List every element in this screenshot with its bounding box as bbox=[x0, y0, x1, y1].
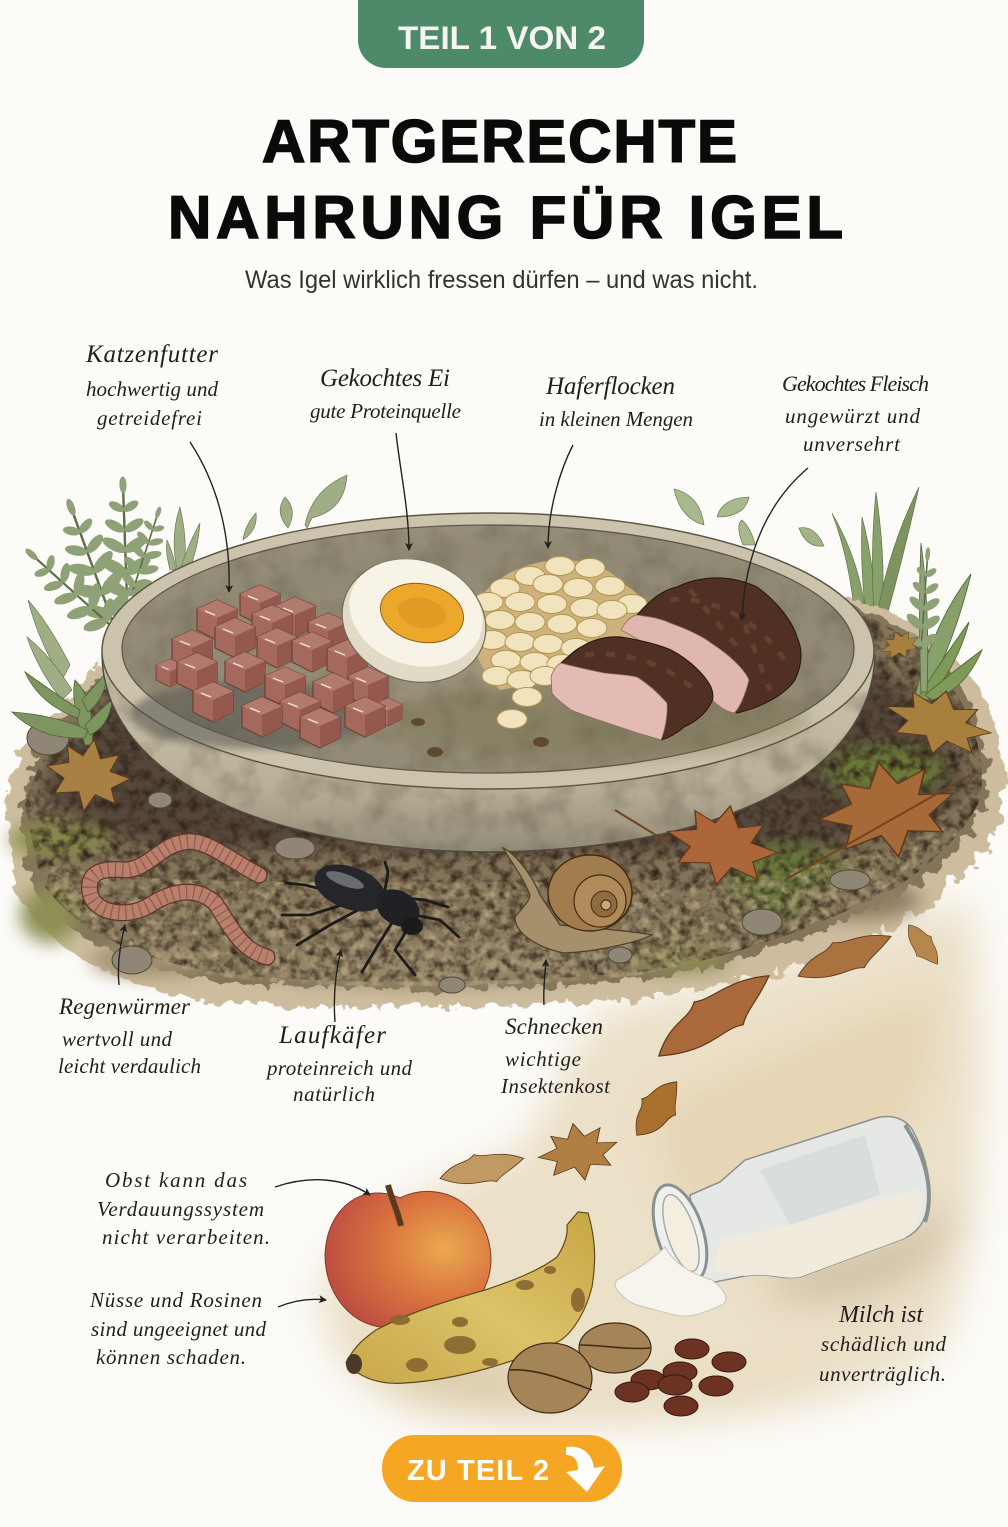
label: Schnecken: wichtige bbox=[505, 1047, 581, 1071]
label: Gekochtes Fleisch bbox=[782, 371, 929, 456]
label: Haferflocken: Haferflocken bbox=[545, 373, 675, 400]
label: Obst bbox=[97, 1168, 270, 1249]
label: Laufkäfer: proteinreich und bbox=[265, 1056, 412, 1080]
title: ARTGERECHTE bbox=[262, 108, 737, 175]
label: Gekochtes Ei bbox=[310, 365, 461, 423]
label: Milch bbox=[819, 1302, 946, 1386]
worm bbox=[89, 842, 267, 957]
beetle bbox=[282, 856, 459, 975]
label: Schnecken bbox=[500, 1014, 611, 1098]
label: Nüsse und Rosinen: können schaden. bbox=[96, 1345, 246, 1369]
banana bbox=[346, 1212, 595, 1383]
label: Milch: schädlich und bbox=[821, 1332, 946, 1356]
label: Katzenfutter: getreidefrei bbox=[97, 406, 202, 430]
label: Gekochtes Ei: gute Proteinquelle bbox=[310, 399, 461, 423]
label: Obst: nicht verarbeiten. bbox=[102, 1225, 270, 1249]
title: NAHRUNG FÜR IGEL bbox=[168, 184, 843, 251]
milk jar bbox=[643, 1116, 929, 1288]
food: cat food cubes bbox=[156, 585, 402, 748]
plants right bbox=[674, 487, 919, 620]
low plants over soil bbox=[12, 543, 982, 745]
label: Laufkäfer: natürlich bbox=[293, 1082, 375, 1106]
label: Obst: Verdauungssystem bbox=[97, 1197, 264, 1221]
label: Laufkäfer: Laufkäfer bbox=[278, 1022, 386, 1049]
dried leaves bbox=[40, 625, 998, 1187]
label: Katzenfutter bbox=[85, 341, 218, 430]
label: Milch: unverträglich. bbox=[819, 1362, 946, 1386]
label: Regenwürmer: wertvoll und bbox=[62, 1027, 172, 1051]
label: Gekochtes Fleisch: Gekochtes Fleisch bbox=[782, 371, 929, 396]
spilled milk powder bbox=[615, 1247, 726, 1316]
walnuts bbox=[508, 1323, 651, 1413]
food: oat flakes bbox=[471, 556, 648, 728]
subtitle: Was Igel wirklich fressen dürfen – und was nicht. bbox=[245, 266, 758, 294]
callout arrows bbox=[118, 433, 808, 1307]
button: to part 2: ZU TEIL 2 bbox=[407, 1455, 549, 1487]
label: Nüsse und Rosinen: sind ungeeignet und bbox=[91, 1317, 266, 1341]
label: Nüsse und Rosinen: Nüsse und Rosinen bbox=[89, 1288, 262, 1312]
label: Laufkäfer bbox=[265, 1022, 412, 1106]
label: Regenwürmer: leicht verdaulich bbox=[58, 1054, 201, 1078]
badge: part 1 of 2: TEIL 1 VON 2 bbox=[398, 20, 606, 56]
label: Regenwürmer: Regenwürmer bbox=[58, 994, 191, 1019]
apple bbox=[325, 1185, 491, 1328]
ground soil bbox=[5, 600, 1003, 1007]
raisins bbox=[615, 1339, 746, 1416]
label: Haferflocken: in kleinen Mengen bbox=[539, 407, 693, 431]
label: Milch: Milch ist bbox=[838, 1302, 924, 1328]
label: Haferflocken bbox=[539, 373, 693, 431]
label: Schnecken: Schnecken bbox=[505, 1014, 603, 1039]
sandy path bbox=[320, 900, 981, 1425]
food: cooked meat bbox=[551, 578, 801, 740]
snail bbox=[503, 848, 652, 953]
label: Gekochtes Fleisch: ungewürzt und bbox=[785, 404, 920, 428]
label: Schnecken: Insektenkost bbox=[500, 1074, 611, 1098]
label: Regenwürmer bbox=[58, 994, 201, 1078]
plate bbox=[102, 513, 875, 852]
title bbox=[168, 108, 843, 251]
button: to part 2 bbox=[382, 1435, 622, 1502]
label: Gekochtes Ei: Gekochtes Ei bbox=[320, 365, 450, 392]
label: Katzenfutter: hochwertig und bbox=[86, 377, 218, 401]
label: Nüsse und Rosinen bbox=[89, 1288, 266, 1369]
food: boiled egg bbox=[326, 541, 502, 701]
label: Katzenfutter: Katzenfutter bbox=[85, 341, 218, 368]
badge: part 1 of 2 bbox=[358, 0, 644, 68]
label: Obst: Obst kann das bbox=[105, 1168, 247, 1192]
label: Gekochtes Fleisch: unversehrt bbox=[803, 432, 901, 456]
plants left bbox=[9, 475, 347, 700]
